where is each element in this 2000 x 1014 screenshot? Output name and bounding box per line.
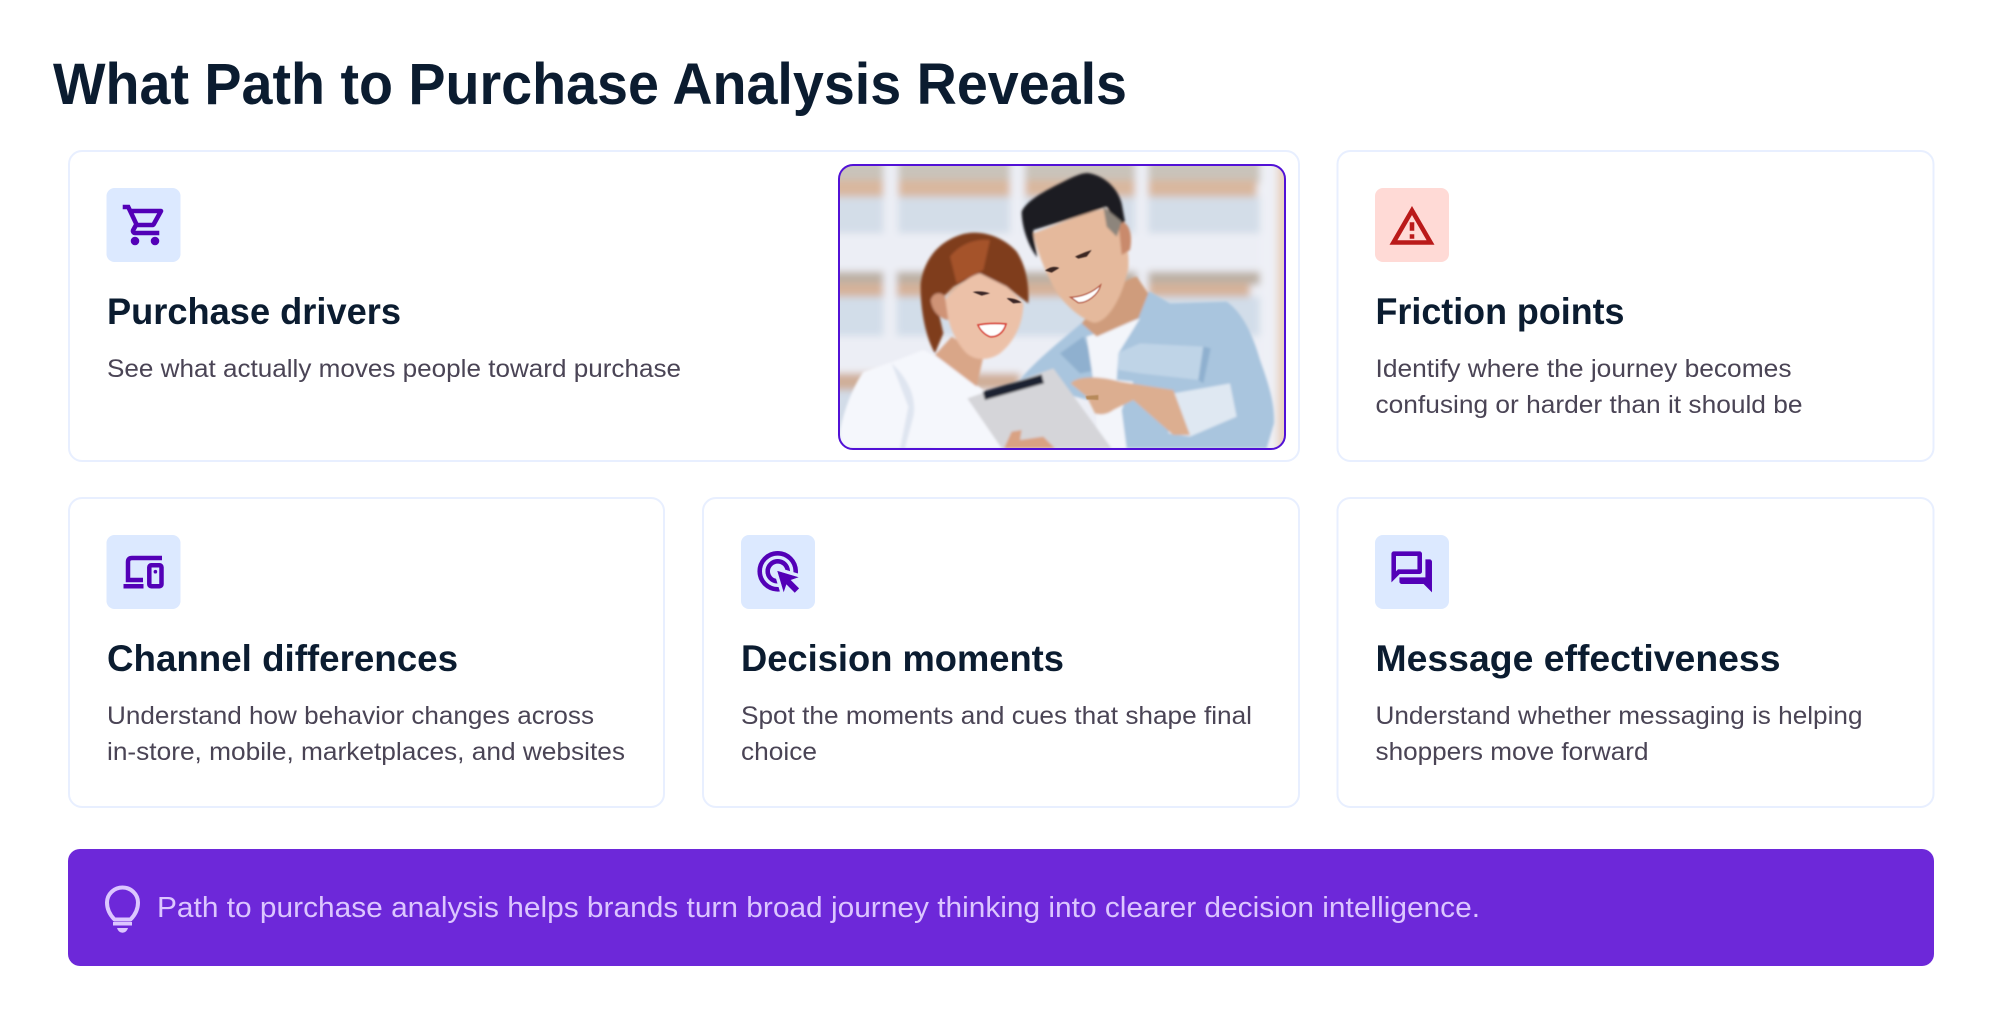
man: hair: [1022, 173, 1125, 257]
callout banner: [68, 849, 1934, 966]
description: purchase drivers: See what actually moves people toward purchase: [107, 355, 681, 383]
panel: purchase drivers: [69, 151, 1300, 461]
icon: devices: [106, 535, 180, 609]
description: message effectiveness: shoppers move forward: [1376, 738, 1648, 766]
description: decision moments: Spot the moments and cues that shape final: [741, 702, 1252, 730]
building background: [840, 166, 1284, 448]
icon: lightbulb: [107, 888, 138, 933]
callout text: Path to purchase analysis helps brands turn broad journey thinking into clearer decision intelligence.: [157, 892, 1480, 924]
heading: friction points: Friction points: [1376, 291, 1624, 332]
description: friction points: Identify where the journey becomes: [1376, 355, 1792, 383]
woman: neck and face: [935, 337, 983, 387]
heading: decision moments: Decision moments: [741, 638, 1064, 679]
icon: click target: [741, 535, 815, 609]
description: friction points: [1376, 355, 1802, 419]
description: channel differences: Understand how behavior changes across: [107, 702, 594, 730]
man: hand and forearm: [1071, 377, 1190, 435]
panel: decision moments: [703, 498, 1299, 807]
description: channel differences: in-store, mobile, marketplaces, and websites: [107, 738, 625, 766]
heading: channel differences: Channel differences: [107, 638, 458, 679]
description: decision moments: [741, 702, 1252, 766]
description: friction points: confusing or harder than it should be: [1376, 391, 1802, 419]
man: eyes and smile: [1045, 250, 1092, 273]
description: decision moments: choice: [741, 738, 817, 766]
man: white tee: [1087, 318, 1140, 448]
panel: message effectiveness: [1338, 498, 1934, 807]
panel: friction points: [1338, 151, 1934, 461]
panel: channel differences: [69, 498, 664, 807]
description: message effectiveness: [1376, 702, 1862, 766]
woman: eyes and mouth: [973, 291, 1022, 303]
photo: couple looking at a tablet: [838, 164, 1286, 450]
man: jacket: [1018, 292, 1274, 448]
description: message effectiveness: Understand whether messaging is helping: [1376, 702, 1862, 730]
man: neck and face: [1082, 277, 1148, 337]
icon: speech bubbles: [1375, 535, 1449, 609]
woman: hair: [921, 233, 1029, 353]
ring: [1086, 395, 1098, 400]
woman: hand: [1004, 430, 1055, 448]
description: channel differences: [107, 702, 625, 766]
icon: shopping cart: [106, 188, 180, 262]
icon: warning: [1375, 188, 1449, 262]
tablet: [967, 368, 1112, 448]
heading: purchase drivers: Purchase drivers: [107, 291, 401, 332]
title: What Path to Purchase Analysis Reveals: [53, 52, 1127, 117]
woman: white shirt: [840, 350, 1002, 448]
heading: message effectiveness: Message effectiveness: [1376, 638, 1780, 679]
